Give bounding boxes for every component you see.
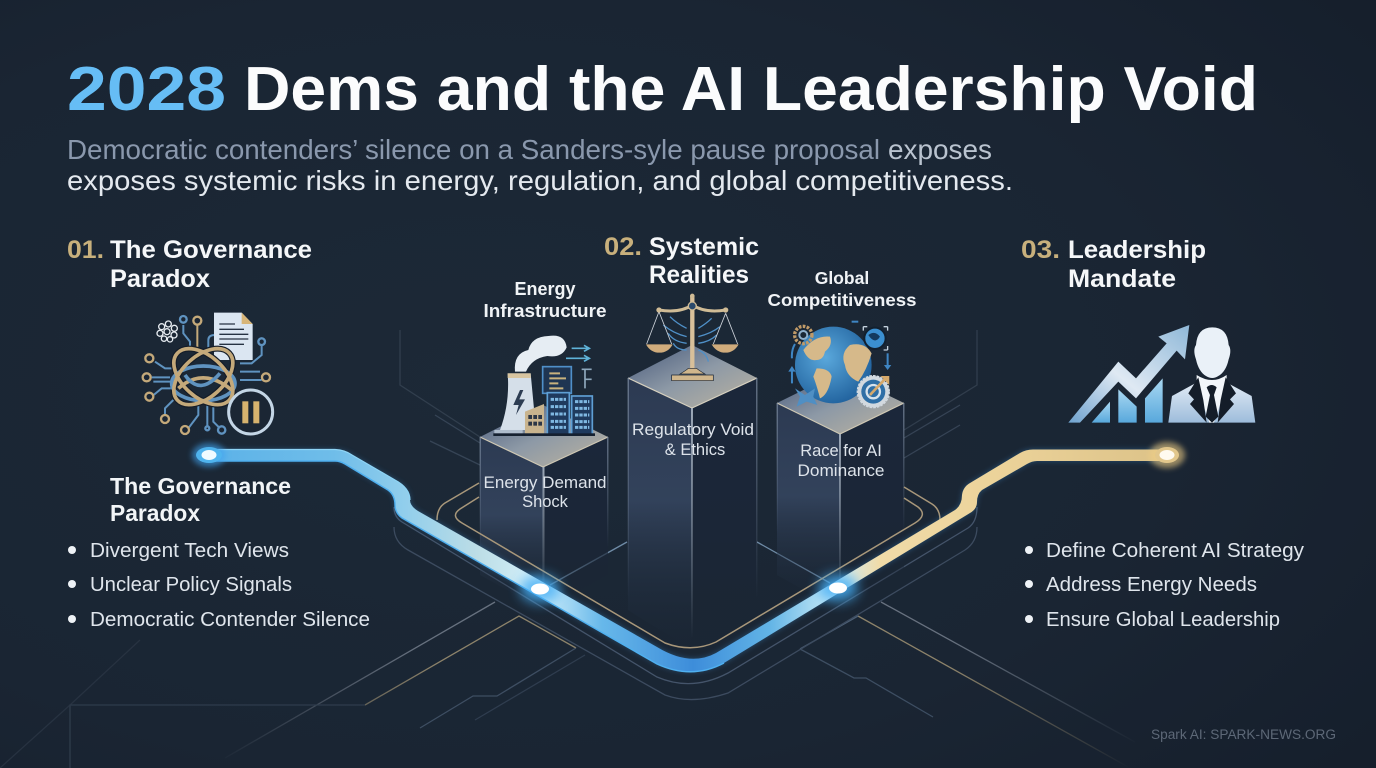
title: Dems and the AI Leadership Void: [244, 55, 1258, 124]
path node: left junction: [520, 575, 560, 603]
title: 2028: [67, 55, 226, 124]
pillar label: Regulatory Void & Ethics: & Ethics: [665, 441, 725, 459]
icon: balance scales: [646, 294, 739, 381]
pillar label: Regulatory Void & Ethics: Regulatory Void: [632, 421, 754, 439]
subheading: The Governance Paradox: The Governance: [110, 473, 291, 499]
pillar label: Energy Demand Shock: Energy Demand: [484, 474, 606, 492]
knot: [163, 338, 243, 415]
brain: [157, 321, 177, 342]
cross tool: [795, 388, 817, 407]
label: Global Competitiveness: [768, 268, 917, 310]
circuit terminals blue: [180, 316, 265, 434]
server racks: [493, 367, 595, 436]
glowing path: [209, 450, 1167, 672]
bullet list: governance: Divergent Tech Views: [90, 540, 289, 562]
icon: energy plant and servers: [493, 336, 595, 436]
pillar label: Energy Demand Shock: [484, 474, 606, 511]
smoke: [515, 336, 567, 372]
circuit terminals: [143, 317, 270, 434]
path node: right junction: [818, 574, 858, 602]
subtitle: [67, 134, 1013, 196]
pillar label: Race for AI Dominance: Dominance: [798, 462, 884, 480]
bullet list: governance: [68, 540, 370, 631]
document: [214, 313, 253, 360]
pillar: race for AI dominance: [776, 372, 904, 610]
subtitle: Democratic contenders’ silence on a Sanders-syle pause proposal: [67, 134, 880, 165]
path node: end: [1149, 442, 1185, 468]
path node: start: [192, 443, 226, 467]
arrow: [1068, 325, 1189, 423]
gear: [795, 326, 812, 344]
subtitle: exposes systemic risks in energy, regulation, and global competitiveness.: [67, 165, 1013, 196]
icon: globe: [788, 322, 891, 407]
heading: 02 Systemic Realities: [604, 233, 759, 289]
bullet list: governance: Unclear Policy Signals: [90, 574, 292, 596]
person: [1168, 327, 1255, 423]
subheading: The Governance Paradox: Paradox: [110, 500, 200, 526]
pillar label: Regulatory Void & Ethics: [632, 421, 754, 459]
heading: 03 Leadership Mandate: 03.: [1021, 236, 1060, 264]
label: Global Competitiveness: Competitiveness: [768, 290, 917, 310]
heading: 02 Systemic Realities: Realities: [649, 261, 749, 289]
heading: 01 The Governance Paradox: Paradox: [110, 265, 210, 293]
bullet list: governance: Democratic Contender Silence: [90, 609, 370, 631]
heading: 03 Leadership Mandate: Leadership: [1068, 236, 1206, 264]
small globe: [863, 327, 888, 350]
beam and post: [659, 305, 726, 311]
pillar: energy demand shock: [480, 405, 608, 610]
strings: [647, 312, 738, 344]
source credit: Spark AI: SPARK-NEWS.ORG: [1151, 727, 1336, 742]
icon: growth chart and leader: [1068, 325, 1255, 423]
circuits: [663, 317, 720, 362]
label: Energy Infrastructure: [484, 279, 606, 321]
heading: 01 The Governance Paradox: 01.: [67, 236, 104, 264]
subtitle: exposes: [888, 134, 992, 165]
heading: 02 Systemic Realities: 02.: [604, 233, 642, 261]
flow arrows: [566, 345, 592, 388]
bullet list: mandate: Ensure Global Leadership: [1046, 609, 1280, 631]
bars: [1092, 378, 1163, 423]
orbit arrows: [792, 322, 888, 383]
label: Energy Infrastructure: Energy: [514, 279, 576, 299]
pans: [646, 344, 739, 353]
bullet list: mandate: [1025, 540, 1304, 631]
pillar label: Energy Demand Shock: Shock: [522, 493, 569, 511]
subheading: The Governance Paradox: [110, 473, 291, 526]
heading: 01 The Governance Paradox: [67, 236, 312, 293]
heading: 03 Leadership Mandate: Mandate: [1068, 265, 1176, 293]
pillar label: Race for AI Dominance: Race for AI: [800, 442, 882, 460]
circuit background lines: [0, 330, 1135, 768]
label: Global Competitiveness: Global: [815, 268, 869, 288]
pause button: [229, 390, 273, 434]
target gear: [858, 376, 889, 407]
pillar label: Race for AI Dominance: [798, 442, 884, 480]
bullet list: mandate: Define Coherent AI Strategy: [1046, 540, 1304, 562]
heading: 03 Leadership Mandate: [1021, 236, 1206, 293]
inner gold tracks: [437, 483, 940, 648]
label: Energy Infrastructure: Infrastructure: [484, 301, 606, 321]
pillar: regulatory void: [628, 345, 758, 650]
heading: 01 The Governance Paradox: The Governance: [110, 236, 312, 264]
bullet list: mandate: Address Energy Needs: [1046, 574, 1257, 596]
heading: 02 Systemic Realities: Systemic: [649, 233, 759, 261]
icon: governance knot: [143, 313, 273, 434]
continents: [803, 336, 872, 398]
factory: [525, 404, 544, 433]
base: [672, 368, 713, 381]
cooling tower: [494, 373, 536, 435]
